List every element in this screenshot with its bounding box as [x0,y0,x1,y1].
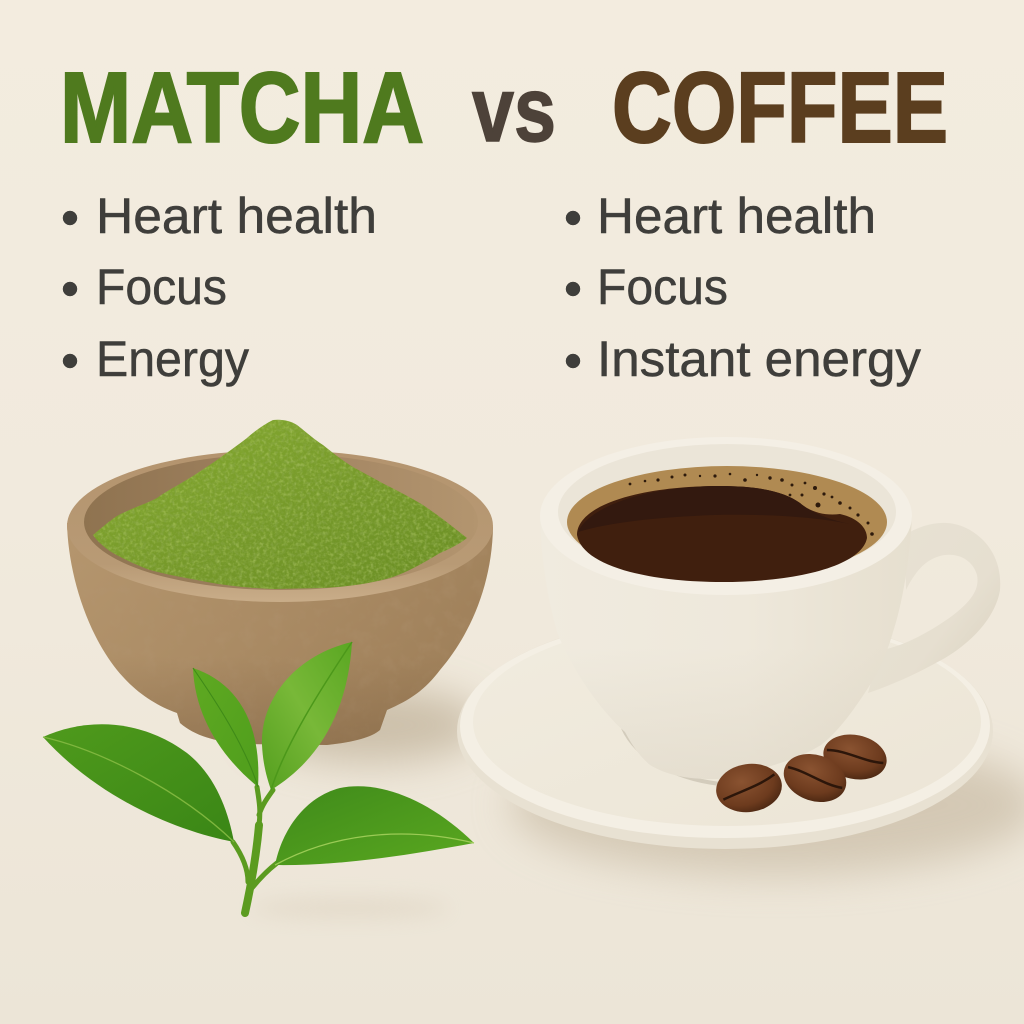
bowl shadow [255,687,485,763]
stem [233,787,277,913]
bullet: focus: Focus [597,259,728,315]
bullet: heart health: Heart health [597,188,876,244]
saucer top [460,614,990,838]
bean front [713,760,785,816]
cup rim [540,437,912,595]
illustration: coffee cup and saucer [457,437,1024,875]
cup foot ring [623,728,720,784]
powder mound [93,420,467,589]
leaf: middle left [193,668,258,787]
leaf: far left [43,724,234,842]
coffee surface [577,486,867,582]
bowl mottling [67,523,493,745]
coffee [577,486,867,582]
title [60,52,948,164]
coffee beans [713,729,891,816]
title: vs: vs [472,59,556,161]
cup body shading [540,516,912,779]
sprig shadow [250,898,450,918]
saucer shadow [510,735,1024,875]
coffee benefits list [566,188,921,387]
matcha powder [93,420,467,589]
saucer lip [457,613,993,849]
bowl inside [84,454,478,590]
bean back [819,729,891,785]
bowl rim [67,450,493,602]
bowl body [67,523,493,745]
title: coffee: COFFEE [612,52,948,164]
cup inner wall [558,444,896,580]
leaf: right [275,786,474,865]
cup body [540,516,912,779]
illustration: matcha bowl [67,420,493,763]
crema bubbles [628,472,874,536]
crema [567,466,887,578]
illustration: tea sprig [43,642,474,918]
title: matcha: MATCHA [60,52,424,164]
bullet: instant energy: Instant energy [597,331,921,387]
bowl shading [67,523,493,745]
matcha benefits list [63,188,377,387]
cup handle [868,523,1000,693]
powder grain dark [93,420,467,589]
leaf: top right [262,642,352,790]
bullet: focus: Focus [96,259,227,315]
bullet: heart health: Heart health [96,188,377,244]
powder grain light [93,420,467,589]
coffee reflection [578,486,850,532]
saucer well [473,618,981,826]
bullet: energy: Energy [96,331,249,387]
bean middle [777,746,853,810]
